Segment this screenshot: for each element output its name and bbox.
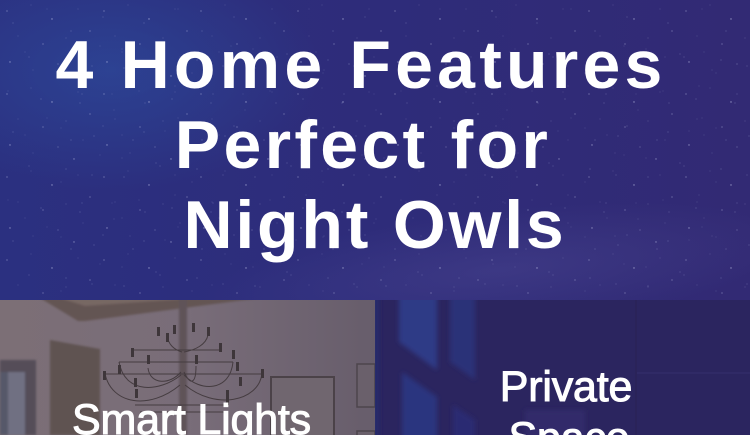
title: Perfect for	[175, 107, 551, 183]
panel: private space	[375, 300, 750, 435]
background: starry night sky	[0, 0, 750, 300]
label: private: Private	[500, 363, 632, 411]
photo: dark window view	[375, 300, 637, 435]
title: 4 Home Features	[56, 27, 666, 103]
photo: room with chandelier	[0, 300, 375, 435]
title: Night Owls	[183, 187, 567, 263]
title	[56, 27, 666, 263]
panel: smart lights	[0, 300, 375, 435]
